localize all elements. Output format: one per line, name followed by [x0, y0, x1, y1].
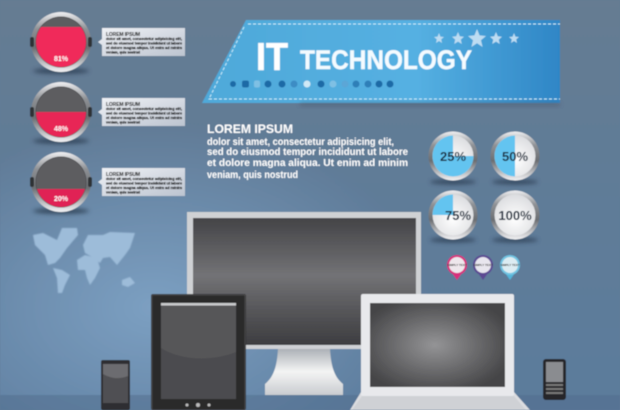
text block: dolor sit amet, consectetur adipisicing elit,: [207, 136, 394, 148]
text block: sed do eiusmod tempor incididunt ut labore: [207, 146, 408, 158]
world map: [33, 228, 135, 293]
gauge: 75%: [428, 190, 478, 242]
callout: second: dolor sit amet, consectetur adipisicing elit,: [106, 107, 182, 111]
laptop: [350, 294, 530, 410]
gauge: 81%: 81%: [54, 56, 69, 63]
pin: purple: SIMPLY TEXT: [473, 263, 493, 267]
callout: third: LOREM IPSUM: [106, 172, 140, 178]
gauge: 48%: [30, 82, 92, 144]
gauge: 25%: [428, 132, 478, 184]
feature phone: [543, 359, 566, 400]
callout: second: LOREM IPSUM: [106, 102, 140, 108]
callout: third: dolor sit amet, consectetur adipisicing elit,: [106, 177, 182, 181]
callout: third: et dolore magna aliqua. Ut enim ad minim: [106, 186, 183, 190]
gauge: 25%: 25%: [440, 149, 466, 164]
title text: TECHNOLOGY: [300, 45, 472, 75]
gauge: 50%: 50%: [502, 149, 528, 164]
text block: veniam, quis nostrud: [207, 169, 298, 181]
callout: first: sed do eiusmod tempor incididunt ut labore: [106, 42, 182, 46]
gauge: 100%: 100%: [498, 208, 532, 223]
text block: LOREM IPSUM: [207, 122, 293, 136]
callout: first: veniam, quis nostrud: [106, 50, 141, 54]
pin: blue: SIMPLY TEXT: [500, 263, 520, 267]
callout: third: veniam, quis nostrud: [106, 190, 141, 194]
callout: first: et dolore magna aliqua. Ut enim ad minim: [106, 46, 183, 50]
gauge: 48%: 48%: [54, 126, 69, 133]
gauge: 100%: [490, 190, 540, 242]
monitor: [187, 212, 421, 395]
pin: blue: [500, 255, 520, 280]
icon row: [230, 80, 394, 88]
callout: second: [98, 98, 185, 126]
gauge: 20%: [30, 152, 92, 214]
gauge: 75%: 75%: [445, 208, 471, 223]
gauge: 20%: 20%: [54, 196, 69, 203]
callout: second: et dolore magna aliqua. Ut enim ad minim: [106, 116, 183, 120]
title ribbon: [202, 20, 560, 106]
callout: first: LOREM IPSUM: [106, 32, 140, 38]
callout: first: [98, 28, 185, 56]
callout: second: sed do eiusmod tempor incididunt ut labore: [106, 112, 182, 116]
pin: pink: [447, 255, 467, 280]
tablet: [151, 294, 246, 410]
pin: pink: SIMPLY TEXT: [447, 263, 467, 267]
smartphone: [101, 360, 130, 410]
callout: third: [98, 168, 185, 196]
text block: et dolore magna aliqua. Ut enim ad minim: [207, 157, 408, 169]
title text: [256, 36, 472, 79]
callout: second: veniam, quis nostrud: [106, 120, 141, 124]
title text: IT: [256, 36, 288, 79]
rating stars: [434, 29, 519, 47]
pin: purple: [473, 255, 493, 280]
text block: [207, 122, 408, 181]
gauge: 50%: [490, 132, 540, 184]
gauge: 81%: [30, 12, 92, 74]
callout: first: dolor sit amet, consectetur adipisicing elit,: [106, 37, 182, 41]
callout: third: sed do eiusmod tempor incididunt ut labore: [106, 182, 182, 186]
